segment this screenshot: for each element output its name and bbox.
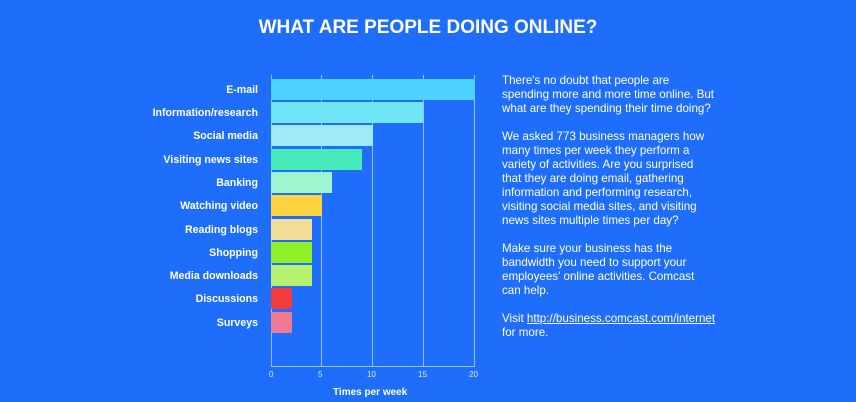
bar chart: Social media	[193, 130, 258, 142]
text block: Visit http://business.comcast.com/internet	[502, 312, 715, 325]
text block: information and performing research,	[502, 186, 692, 199]
text block: what are they spending their time doing?	[502, 102, 711, 115]
bar chart: 5	[318, 370, 322, 379]
text block: employees' online activities. Comcast	[502, 270, 694, 283]
bar chart: E-mail	[226, 84, 258, 96]
text block: There's no doubt that people are	[502, 74, 669, 87]
bar chart: Media downloads	[170, 270, 258, 282]
text block: variety of activities. Are you surprised	[502, 158, 693, 171]
bar chart: Discussions	[196, 293, 258, 305]
text block: spending more and more time online. But	[502, 88, 714, 101]
text block: bandwidth you need to support your	[502, 256, 686, 269]
bar chart: 10	[367, 370, 376, 379]
bar chart: Information/research	[153, 107, 258, 119]
title: WHAT ARE PEOPLE DOING ONLINE?	[259, 17, 597, 38]
bar chart: Times per week	[333, 387, 407, 398]
text block	[502, 74, 716, 339]
text block: Make sure your business has the	[502, 242, 672, 255]
text block: for more.	[502, 326, 548, 339]
text block: can help.	[502, 284, 549, 297]
text block: many times per week they perform a	[502, 144, 690, 157]
bar chart: Visiting news sites	[163, 154, 258, 166]
bar chart: Surveys	[217, 317, 258, 329]
text block: that they are doing email, gathering	[502, 172, 684, 185]
text block: visiting social media sites, and visiting	[502, 200, 697, 213]
bar chart: Banking	[216, 177, 258, 189]
bar chart: 20	[469, 370, 478, 379]
bar chart: 15	[418, 370, 427, 379]
text block: news sites multiple times per day?	[502, 214, 679, 227]
bar chart: Reading blogs	[185, 224, 258, 236]
bar chart: Shopping	[209, 247, 258, 259]
bar chart: Watching video	[180, 200, 258, 212]
text block: We asked 773 business managers how	[502, 130, 704, 143]
bar chart	[153, 75, 478, 398]
bar chart: 0	[269, 370, 273, 379]
